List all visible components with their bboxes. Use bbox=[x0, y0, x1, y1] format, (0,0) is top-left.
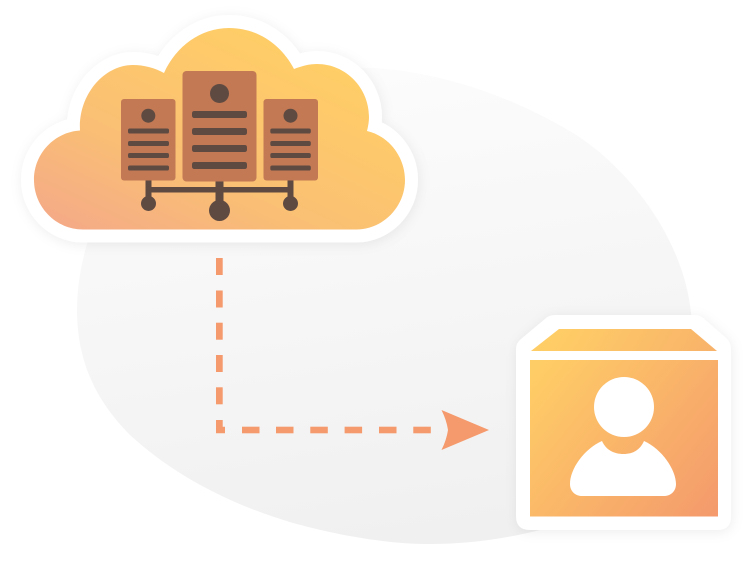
box front bbox=[530, 360, 718, 516]
arrowhead bbox=[442, 410, 489, 450]
icon: cloud with servers bbox=[34, 28, 405, 230]
connector lines bbox=[141, 178, 298, 221]
background blob bbox=[77, 68, 691, 544]
cloud fill bbox=[34, 28, 405, 230]
icon: user box bbox=[516, 315, 731, 530]
server right bbox=[264, 99, 318, 180]
server centre bbox=[182, 71, 256, 182]
user body bbox=[570, 441, 676, 496]
cloud outline bbox=[34, 28, 405, 230]
server left bbox=[121, 99, 176, 180]
arrow: dashed connector from cloud to user bbox=[216, 258, 489, 450]
user head bbox=[594, 377, 654, 437]
box outline bbox=[516, 315, 731, 530]
box lid bbox=[531, 329, 717, 351]
